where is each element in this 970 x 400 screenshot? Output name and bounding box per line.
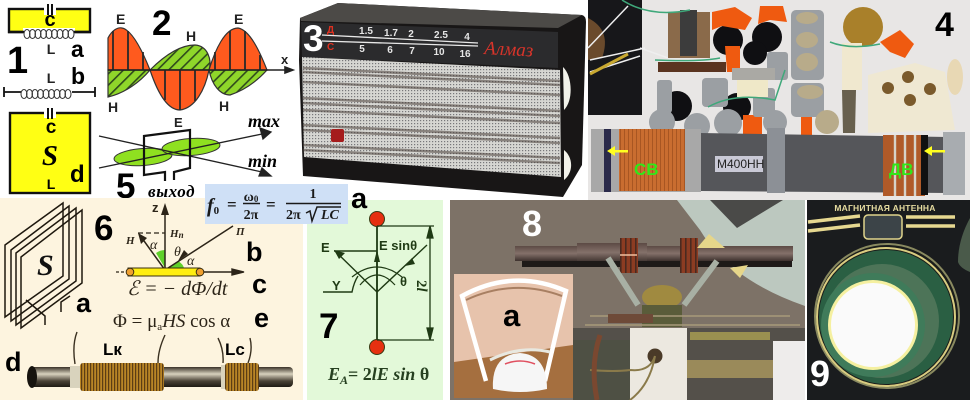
- black capacitors: [662, 22, 782, 121]
- wavechange switch: [868, 63, 955, 133]
- dial scale: 2.5: [434, 30, 448, 41]
- label 6: 6: [94, 209, 113, 248]
- panel 3: radio receiver photo: [299, 3, 586, 197]
- formula EMF: ℰ = − dΦ/dt: [127, 278, 228, 300]
- wave labels: x: [281, 52, 289, 67]
- label a: a: [76, 288, 92, 318]
- metal cans: [649, 10, 824, 139]
- label a: a: [351, 183, 368, 215]
- dial band: [301, 22, 558, 68]
- formula flux: Φ = μ: [113, 311, 157, 332]
- circuit d: c: [46, 117, 57, 138]
- label b: b: [246, 237, 262, 267]
- green wires: [622, 0, 880, 107]
- speaker grille: [302, 57, 561, 177]
- vector diagram: α: [150, 238, 158, 253]
- resonance formula box: LC: [320, 208, 340, 223]
- formula: A: [339, 373, 348, 387]
- dial scale: 4: [464, 32, 470, 43]
- field vectors: [321, 238, 427, 293]
- dial scale: 16: [459, 49, 471, 60]
- label 8: 8: [522, 203, 542, 244]
- red E lobes: [108, 28, 267, 110]
- tuning knobs: [563, 67, 571, 180]
- resonance formula box: ω: [244, 190, 254, 205]
- vector diagram: [116, 200, 245, 276]
- vector diagram: п: [179, 230, 184, 240]
- dial scale: 1.7: [384, 28, 398, 39]
- dial scale: 6: [387, 45, 393, 56]
- circuit a: a: [71, 36, 84, 62]
- coil labels: [103, 340, 245, 359]
- x axis arrow: [108, 67, 293, 73]
- indicator window and gold lines: [808, 215, 970, 272]
- resonance formula box: 0: [254, 194, 259, 204]
- circuit d: S: [42, 140, 58, 172]
- label 7: 7: [319, 307, 338, 346]
- direction labels: min: [248, 151, 277, 171]
- field vectors: θ: [400, 274, 407, 289]
- formula flux: a: [157, 321, 162, 333]
- coil labels: Lc: [225, 340, 245, 359]
- wave labels: E: [116, 11, 125, 27]
- wave labels: H: [186, 28, 196, 44]
- formula: = 2: [348, 364, 372, 384]
- pale disc background: [677, 200, 805, 306]
- emblem: [331, 129, 344, 142]
- resonance formula box: 1: [310, 187, 316, 202]
- direction labels: max: [248, 111, 280, 131]
- dimension 2l: 2 l: [413, 280, 429, 292]
- dial scale: Д: [327, 25, 334, 36]
- circuit a: c: [44, 9, 56, 31]
- formula: E: [328, 364, 340, 384]
- circuit b: L: [47, 70, 56, 86]
- circuit d: [10, 108, 90, 193]
- dial scale: 2: [408, 29, 414, 40]
- resonance formula box: 2π: [286, 208, 301, 223]
- green H lobes: [108, 45, 267, 97]
- inset label a: a: [503, 298, 521, 333]
- label d: d: [5, 347, 22, 377]
- circuit d: L: [47, 176, 56, 192]
- label 4: 4: [935, 6, 954, 44]
- panel 5: frame antenna directivity: [99, 111, 280, 206]
- circuit b: b: [71, 63, 85, 89]
- dial scale: 7: [409, 46, 415, 57]
- label 2: 2: [152, 4, 171, 43]
- formula flux: cos α: [190, 311, 230, 332]
- panel 6: loop antenna and ferrite rod: [0, 198, 303, 400]
- circuit a: [8, 3, 91, 62]
- knob: [815, 244, 959, 388]
- formula flux: HS: [161, 311, 186, 332]
- plastic clip: [767, 128, 785, 193]
- coil labels: ДВ: [889, 160, 913, 179]
- dipole: [370, 212, 384, 354]
- field vectors: E sinθ: [379, 238, 417, 253]
- label 1: 1: [7, 40, 28, 82]
- dial scale: С: [327, 42, 334, 53]
- brass can: [843, 7, 883, 47]
- panel 7: dipole antenna: [307, 183, 443, 400]
- circuit b: [4, 63, 95, 98]
- loop frame: [144, 130, 190, 181]
- black box: [588, 0, 642, 115]
- dial scale: 5: [359, 44, 365, 55]
- resonance formula box: f: [207, 195, 214, 217]
- max and min direction arrows: [99, 128, 271, 176]
- field vectors: Y: [332, 278, 341, 293]
- rod marking: М400НН: [717, 157, 764, 171]
- lower chassis: [573, 328, 805, 400]
- circuit a: L: [47, 41, 56, 57]
- arrows: [607, 146, 945, 156]
- left coil former: [591, 129, 701, 192]
- circuit d: d: [70, 161, 85, 188]
- label 3: 3: [303, 18, 324, 59]
- hole with wires: [590, 335, 662, 400]
- vector diagram: H: [125, 235, 135, 247]
- S label: S: [37, 249, 54, 282]
- label 9: 9: [810, 353, 830, 394]
- ferrite rod with coils: [27, 332, 293, 391]
- resonance formula box: =: [227, 195, 237, 214]
- orange capacitors: [712, 6, 914, 135]
- wave labels: E: [234, 11, 243, 27]
- dial scale: 10: [433, 47, 445, 58]
- vector diagram: α: [187, 254, 195, 269]
- vector diagram: П: [235, 226, 245, 238]
- ferrite rod: [700, 133, 947, 193]
- output label: выход: [148, 182, 195, 201]
- panel 2: electromagnetic wave: [108, 4, 293, 115]
- brand name: Алмаз: [482, 38, 534, 62]
- label 5: 5: [116, 167, 135, 206]
- coil labels: Lк: [103, 340, 122, 359]
- ferrite rod 8: [515, 234, 793, 278]
- panel 9: magnetic antenna control: [807, 200, 970, 400]
- mount: [585, 285, 800, 327]
- white switch: [842, 43, 862, 90]
- right coil: [883, 132, 965, 196]
- white block: [630, 328, 687, 400]
- wave labels: [108, 11, 289, 115]
- panel 8: antenna photo: [450, 200, 805, 400]
- panel 1: oscillating circuits: [4, 3, 95, 193]
- radio body: [299, 3, 586, 197]
- dimension 2l: [377, 226, 434, 340]
- inset: room antenna: [454, 274, 573, 398]
- dial scale: 1.5: [359, 26, 373, 37]
- vector diagram: z: [152, 200, 159, 215]
- direction labels: [248, 111, 280, 171]
- green lobes: [113, 136, 221, 168]
- formula: lE sin θ: [372, 364, 429, 384]
- wave labels: H: [219, 98, 229, 114]
- coil labels: СВ: [634, 160, 659, 179]
- resonance formula box: 0: [214, 205, 220, 217]
- field vectors: E: [321, 240, 330, 255]
- label e: e: [254, 303, 269, 333]
- panel 4: receiver chassis photo: [588, 0, 970, 200]
- resonance formula box: =: [266, 195, 276, 214]
- support arms: [608, 258, 717, 305]
- caption: МАГНИТНАЯ АНТЕННА: [834, 203, 936, 213]
- resonance formula box: [205, 184, 348, 224]
- stacked frames: [5, 203, 82, 328]
- coil labels: [634, 160, 913, 179]
- wave labels: H: [108, 99, 118, 115]
- dial scale: [322, 25, 478, 60]
- vector diagram: θ: [174, 245, 181, 260]
- vector diagram: H: [170, 228, 179, 240]
- label c: c: [252, 269, 267, 299]
- label E: E: [174, 115, 183, 130]
- circuit board and parts: [622, 0, 963, 139]
- resonance formula box: 2π: [244, 208, 259, 223]
- rod white label: [715, 156, 763, 172]
